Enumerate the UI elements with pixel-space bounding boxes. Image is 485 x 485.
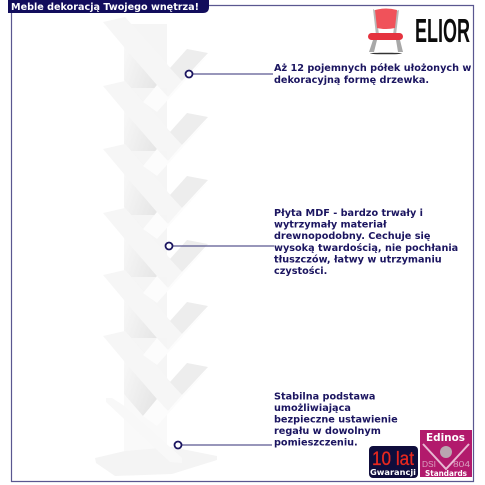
icon: red chair [368,8,403,54]
callout: MDF board: wytrzymały materiał [274,220,387,230]
callout: MDF board: wysoką twardością, nie pochłania [274,242,458,254]
callout: MDF board [166,208,458,277]
badge: 10 years warranty: Gwarancji [370,468,416,477]
illustration: tree bookshelf [95,17,217,476]
badge: Edinos standards [420,430,472,478]
title banner: Meble dekoracją Twojego wnętrza! [11,2,199,13]
badge: 10 years warranty: 10 lat [372,449,415,470]
callout: MDF board: czystości. [274,265,327,277]
callout: MDF board: tłuszczów, łatwy w utrzymaniu [274,254,442,266]
badge: Edinos standards: Edinos [426,432,465,444]
badge: Edinos standards: 804 [453,460,471,469]
badge: 10 years warranty [369,446,418,478]
callout: MDF board: drewnopodobny. Cechuje się [274,231,431,242]
callout: shelves: Aż 12 pojemnych półek ułożonych w [274,62,471,74]
callout: base: pomieszczeniu. [274,438,358,448]
callout: base [174,392,398,448]
callout: base: umożliwiająca [274,403,351,414]
badge: Edinos standards: DSI [422,460,436,469]
callout: shelves: dekoracyjną formę drzewka. [274,75,429,86]
callout: MDF board: Płyta MDF - bardzo trwały i [274,208,423,219]
callout: base: regału w dowolnym [274,426,381,437]
callout: base: bezpieczne ustawienie [274,414,398,426]
callout: base: Stabilna podstawa [274,392,375,402]
callout: shelves [186,62,471,86]
badge: Edinos standards: Standards [425,469,468,478]
